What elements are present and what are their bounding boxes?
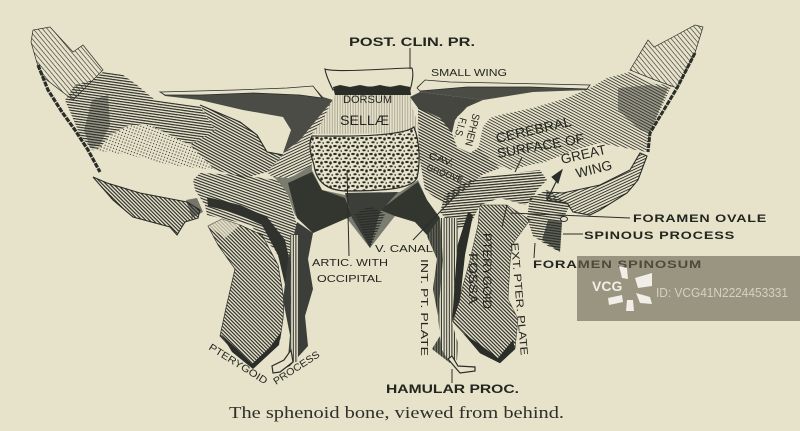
- label: pterygoid: PTERYGOID: [480, 233, 494, 309]
- right small wing: [417, 80, 590, 100]
- watermark panel: [577, 256, 800, 321]
- label: wing: WING: [574, 157, 614, 181]
- label: groove: GROOVE: [425, 162, 464, 185]
- watermark logo: [592, 266, 652, 311]
- label: cav.: CAV.: [427, 150, 455, 168]
- right wing lower rim: [547, 153, 647, 215]
- right internal pterygoid plate: [427, 218, 475, 373]
- label: artic. with: ARTIC. WITH: [312, 258, 388, 269]
- label: v. canal: V. CANAL: [375, 244, 434, 255]
- label: great: GREAT: [559, 142, 607, 167]
- left small wing: [160, 86, 338, 157]
- caption: The sphenoid bone, viewed from behind.: [229, 403, 564, 422]
- label: hamular proc.: HAMULAR PROC.: [386, 384, 519, 396]
- right pterygoid root: [440, 170, 547, 230]
- illustration: sphenoid bone: [31, 25, 703, 373]
- label: cerebral: CEREBRAL: [494, 114, 573, 146]
- label: ext. pter. plate: EXT. PTER. PLATE: [508, 242, 530, 356]
- left external pterygoid plate: [208, 219, 284, 369]
- label: fossa: FOSSA: [466, 253, 480, 304]
- label: sphen: SPHEN: [462, 112, 482, 147]
- label: foramen ovale: FORAMEN OVALE: [633, 213, 767, 225]
- label: sellae: SELLÆ: [340, 113, 389, 128]
- label: fis: F.I.S.: [451, 116, 469, 140]
- watermark logo: VCG: [592, 278, 622, 294]
- spinous process: [527, 190, 570, 252]
- central body: [267, 135, 445, 248]
- label: pterygoid: PTERYGOID: [206, 342, 269, 387]
- label: occipital: OCCIPITAL: [317, 274, 383, 285]
- right sphenoidal fissure: [452, 108, 483, 153]
- dorsum sellae: [312, 68, 420, 134]
- left internal pterygoid plate: [272, 222, 313, 373]
- label: surface of: SURFACE OF: [496, 131, 585, 161]
- label: int. pt. plate: INT. PT. PLATE: [418, 259, 430, 356]
- leader lines and arrows: [347, 48, 630, 383]
- foramen ovale hole: [560, 216, 568, 222]
- label: process: PROCESS: [272, 349, 322, 388]
- right hatched surface and cavernous groove: [410, 92, 500, 205]
- left great wing: [31, 27, 295, 235]
- label: small wing: SMALL WING: [431, 68, 507, 79]
- right great wing: [478, 25, 703, 215]
- left wing lower rim: [93, 177, 200, 235]
- label: spinous process: SPINOUS PROCESS: [584, 230, 735, 242]
- label: foramen spinosum: FORAMEN SPINOSUM: [533, 259, 702, 271]
- label: dorsum: DORSUM: [343, 94, 392, 106]
- watermark id: ID: VCG41N2224453331: [656, 286, 788, 300]
- label: post. clin. pr.: POST. CLIN. PR.: [349, 37, 475, 49]
- right external pterygoid plate: [450, 205, 530, 363]
- body of sphenoid: spongy surface: [310, 127, 419, 191]
- left pterygoid root: [193, 173, 300, 297]
